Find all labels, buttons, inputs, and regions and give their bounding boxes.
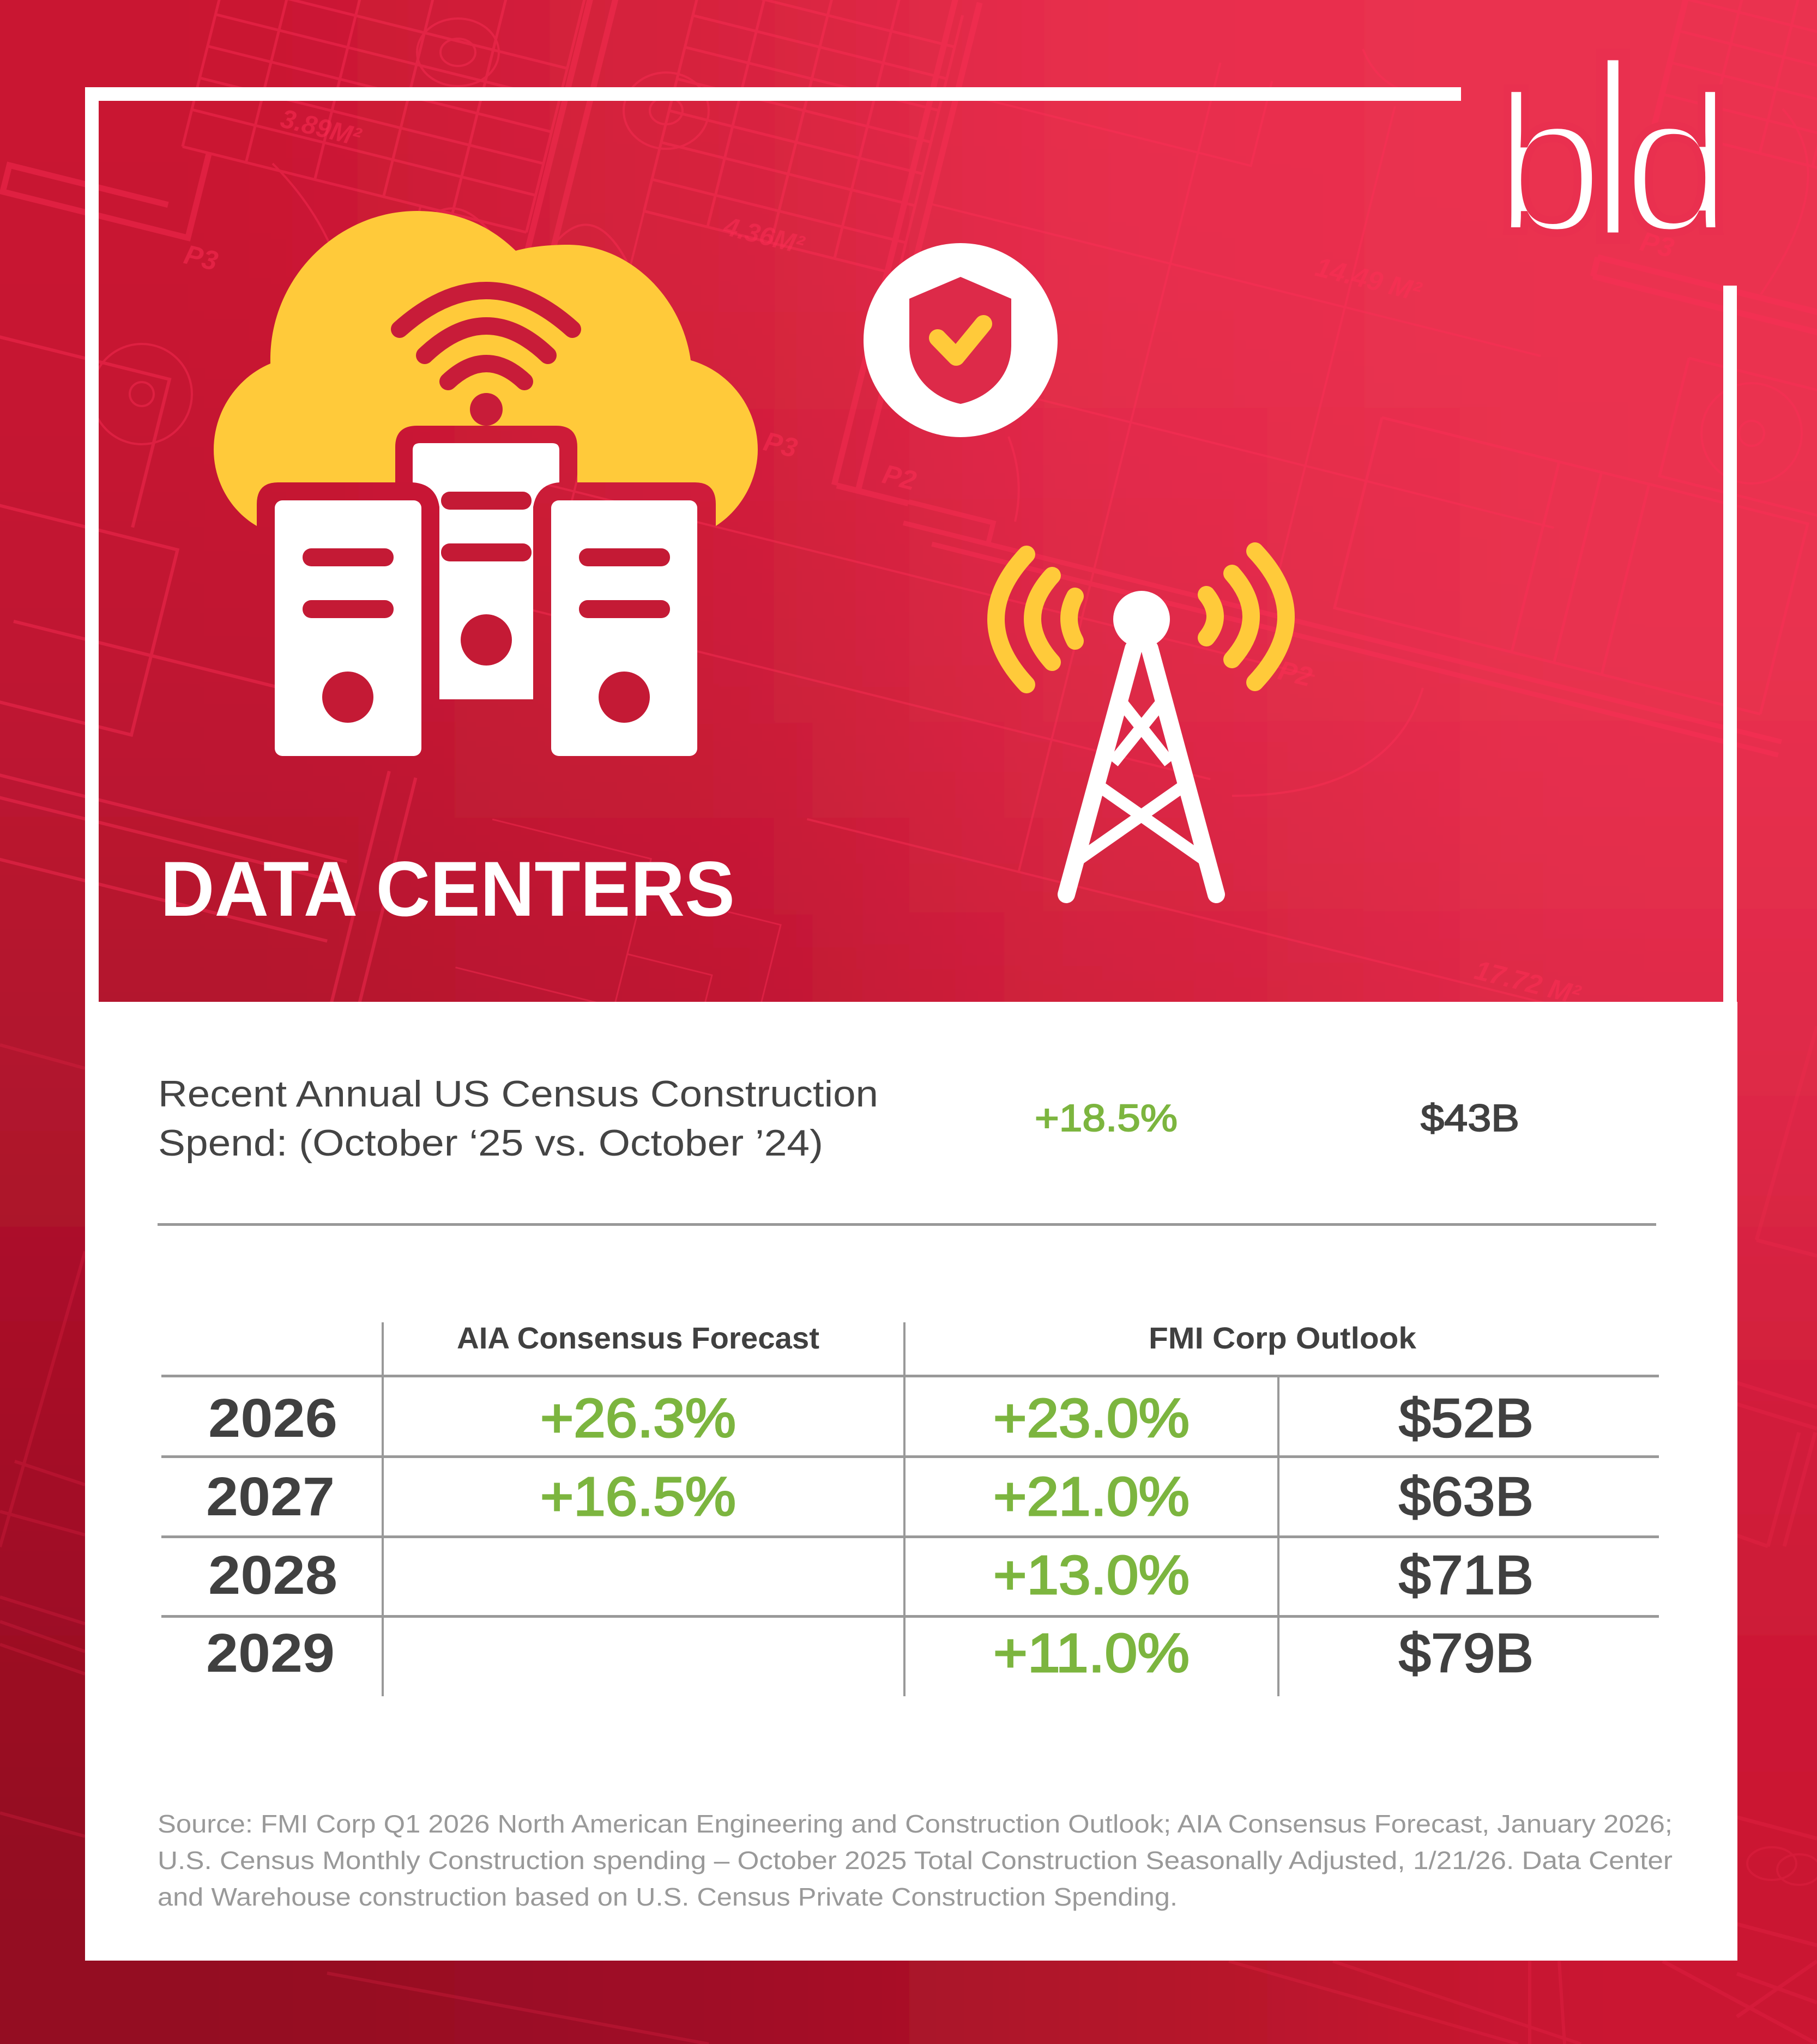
logo: bld: b (1494, 52, 1604, 273)
blueprint labels: 17.72 M² (1471, 954, 1584, 1011)
blueprint labels: 3.89M² (277, 104, 365, 152)
census growth: +18.5% (1035, 1097, 1178, 1139)
right server (551, 500, 697, 756)
FMI growth values (993, 1388, 1190, 1684)
logo: bld: d (1622, 52, 1732, 273)
column headers: FMI Corp Outlook (1149, 1321, 1417, 1355)
blueprint labels: P3 (1637, 226, 1677, 264)
blueprint labels (181, 104, 1677, 1011)
icon: cloud with servers (214, 211, 758, 756)
FMI growth values: +11.0% (993, 1623, 1190, 1684)
blueprint labels: P3 (760, 426, 800, 464)
years (206, 1388, 337, 1684)
cloud (214, 211, 758, 526)
blueprint pattern top (0, 0, 1817, 1413)
AIA values: +16.5% (540, 1466, 736, 1527)
centre server (413, 443, 559, 699)
years: 2028 (208, 1545, 337, 1606)
FMI dollar values: $63B (1399, 1466, 1534, 1527)
icon: radio tower (996, 551, 1286, 894)
source footnote: and Warehouse construction based on U.S. Census Private Construction Spending. (158, 1883, 1178, 1911)
source footnote: U.S. Census Monthly Construction spending – October 2025 Total Construction Seasonally Adjusted, 1/21/26. Data Center (158, 1846, 1673, 1874)
FMI dollar values (1399, 1388, 1534, 1684)
wifi signal (400, 291, 572, 426)
census amount: $43B (1421, 1097, 1519, 1139)
AIA values: +26.3% (540, 1388, 736, 1449)
FMI dollar values: $79B (1399, 1623, 1534, 1684)
logo: bld: l (1585, 9, 1641, 292)
left server (275, 500, 421, 756)
census spend text: Spend: (October ‘25 vs. October ’24) (158, 1122, 823, 1164)
blueprint pattern lower edges (0, 1026, 1817, 2044)
years: 2026 (208, 1388, 337, 1449)
mast (1066, 649, 1216, 894)
divider (158, 1223, 1656, 1226)
table grid (161, 1322, 1659, 1696)
AIA values (540, 1388, 736, 1527)
blueprint labels: 14.49 M² (1312, 251, 1425, 307)
blueprint labels: P2 (879, 458, 919, 497)
title: DATA CENTERS (160, 846, 735, 933)
forecast table (161, 1321, 1659, 1696)
column headers (457, 1321, 1417, 1355)
FMI dollar values: $71B (1399, 1545, 1534, 1606)
icon: shield with check (864, 243, 1058, 437)
blueprint labels: 4.36M² (720, 212, 808, 260)
FMI growth values: +21.0% (993, 1466, 1190, 1527)
census spend text: Recent Annual US Census Construction (158, 1073, 878, 1115)
logo: bld (1494, 9, 1732, 292)
column headers: AIA Consensus Forecast (457, 1321, 819, 1355)
years: 2027 (206, 1466, 335, 1527)
FMI dollar values: $52B (1399, 1388, 1534, 1449)
years: 2029 (206, 1623, 335, 1684)
census spend text (158, 1073, 878, 1164)
signal waves (996, 551, 1286, 685)
source footnote: Source: FMI Corp Q1 2026 North American Engineering and Construction Outlook; AIA Consensus Forecast, January 2026; (158, 1810, 1673, 1838)
FMI growth values: +23.0% (993, 1388, 1190, 1449)
FMI growth values: +13.0% (993, 1545, 1190, 1606)
source footnote (158, 1810, 1673, 1911)
blueprint labels: P3 (181, 239, 221, 277)
blueprint labels: P2 (1275, 655, 1315, 693)
